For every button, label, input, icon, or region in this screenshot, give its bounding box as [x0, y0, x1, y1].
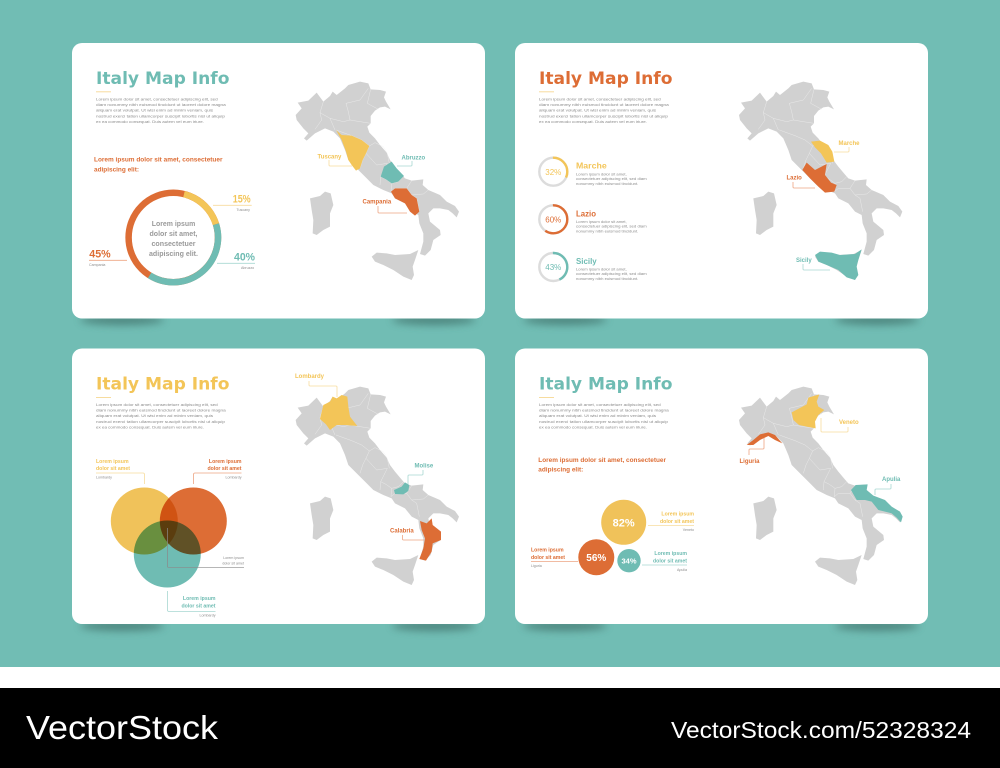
ring: Marche 32%: Lorem ipsum dolor sit amet,: [576, 172, 627, 176]
donut centre text: adipiscing elit.: [149, 251, 198, 258]
text block: nostrud exerci tation ullamcorper suscipit lobortis nisl ut aliquip: [539, 419, 668, 424]
region: Veneto: [792, 394, 824, 428]
text block: nostrud exerci tation ullamcorper suscipit lobortis nisl ut aliquip: [96, 113, 225, 118]
text block: Lorem ipsum dolor sit amet, consectetuer adipiscing elit, sed: [539, 96, 661, 102]
panel: Veneto Liguria Apulia bubbles: [515, 348, 928, 624]
callout: yellow set: [96, 459, 144, 484]
map: Italy with Tuscany Abruzzo Campania: [296, 82, 459, 280]
watermark url text: VectorStock.com/52328324: [671, 717, 971, 743]
text block: Lorem ipsum dolor sit amet, consectetuer adipiscing elit, sed: [539, 402, 661, 407]
callout: teal set: Lombardy: [200, 614, 216, 618]
ring: Lazio 60%: Lazio: [576, 210, 596, 218]
callout: Veneto: dolor sit amet: [660, 519, 694, 525]
panel: Marche Lazio Sicily rings: [515, 43, 928, 318]
callout: Veneto: Veneto: [683, 528, 694, 532]
map label: Veneto: Veneto: [839, 420, 859, 426]
map label: Apulia: [875, 477, 901, 495]
subheading: Lorem ipsum dolor sit amet, consectetuer: [538, 457, 666, 464]
donut centre text: [149, 221, 198, 258]
heading: Italy Map Info: [96, 69, 230, 89]
map label: Marche: Marche: [838, 141, 860, 147]
callout: Veneto: [648, 512, 694, 532]
callout: orange set: dolor sit amet: [207, 466, 242, 472]
callout: Apulia: [642, 551, 687, 572]
region: Lazio: [802, 163, 837, 193]
map label: Abruzzo: Abruzzo: [402, 156, 425, 162]
callout: Apulia: Lorem ipsum: [654, 551, 687, 557]
ring: Marche 32%: nonummy nibh euismod tincidunt.: [576, 182, 638, 186]
callout: Liguria: Lorem ipsum: [531, 548, 564, 554]
callout: 45%: Campania: [89, 263, 105, 267]
callout: yellow set: dolor sit amet: [96, 466, 130, 472]
callout: centre overlap: dolor sit amet: [222, 562, 244, 566]
bubble: 56%: 56%: [586, 553, 606, 564]
venn diagram: [111, 488, 227, 588]
watermark logo text: VectorStock: [26, 710, 218, 747]
map label: Sicily: [796, 258, 830, 270]
callout: 40%: Abruzzo: [241, 266, 254, 270]
map label: Tuscany: [318, 154, 352, 166]
bubble: 34%: 34%: [621, 556, 637, 566]
region: Tuscany: [336, 130, 369, 171]
map label: Marche: [834, 141, 860, 152]
subheading: Lorem ipsum dolor sit amet, consectetuer: [94, 157, 223, 164]
heading: Italy Map Info: [539, 374, 672, 394]
text block: aliquam erat volutpat. Ut wisi enim ad minim veniam, quis: [96, 413, 213, 418]
map label: Abruzzo: [397, 156, 425, 166]
callout: Veneto: Lorem ipsum: [661, 512, 694, 518]
region: Lombardy: [320, 395, 357, 430]
footer white strip: [0, 667, 1000, 688]
bubble: 56%: [578, 539, 614, 575]
text block: [96, 96, 227, 124]
callout: Apulia: Apulia: [677, 568, 687, 572]
text block: [539, 96, 670, 124]
text block: ex ea commodo consequat. Duis autem vel eum iriure.: [96, 119, 204, 124]
bubble: 82%: 82%: [613, 518, 635, 530]
text block: diam nonummy nibh euismod tincidunt ut laoreet dolore magna: [96, 102, 227, 107]
text block: [96, 402, 227, 430]
text block: ex ea commodo consequat. Duis autem vel eum iriure.: [539, 424, 647, 430]
callout: yellow set: Lorem ipsum: [96, 459, 129, 465]
donut centre text: dolor sit amet,: [150, 231, 198, 238]
callout: 15%: Tuscany: [236, 208, 250, 212]
map label: Campania: Campania: [362, 200, 392, 206]
map label: Calabria: Calabria: [390, 528, 414, 534]
ring: Marche 32%: Marche: [576, 162, 607, 170]
footer black bar: [0, 688, 1000, 768]
map label: Lombardy: Lombardy: [295, 374, 325, 380]
donut centre text: consectetuer: [152, 241, 196, 248]
region: Liguria: [747, 432, 782, 445]
ring: Sicily 43%: 43%: [545, 263, 561, 272]
callout: Liguria: dolor sit amet: [531, 555, 565, 561]
map label: Tuscany: Tuscany: [318, 154, 342, 160]
subheading: adipiscing elit:: [538, 466, 583, 474]
region: Campania: [391, 188, 419, 216]
region: Abruzzo: [381, 162, 404, 183]
text block: [539, 402, 670, 430]
map label: Campania: [362, 200, 407, 213]
callout: 45%: [89, 248, 127, 267]
callout: 15%: 15%: [233, 194, 251, 206]
panel: Lombardy Molise Calabria venn: [72, 348, 485, 624]
text block: diam nonummy nibh euismod tincidunt ut laoreet dolore magna: [539, 408, 670, 412]
shadows under panels: [80, 315, 919, 631]
subheading: [94, 157, 223, 174]
region: Calabria: [419, 518, 441, 561]
text block: aliquam erat volutpat. Ut wisi enim ad minim veniam, quis: [539, 413, 656, 418]
text block: ex ea commodo consequat. Duis autem vel eum iriure.: [96, 424, 204, 430]
region: Marche: [811, 141, 834, 163]
map label: Lombardy: [295, 374, 337, 397]
map label: Veneto: [821, 418, 859, 432]
ring: Marche 32%: consectetuer adipiscing elit, sed diam: [576, 177, 647, 181]
callout: teal set: dolor sit amet: [181, 604, 216, 610]
bubble: 34%: [617, 549, 641, 572]
map label: Liguria: [740, 438, 764, 465]
panel: Tuscany Abruzzo Campania donut: [72, 43, 485, 318]
map label: Molise: [408, 464, 434, 484]
ring: Sicily 43%: nonummy nibh euismod tincidunt.: [576, 277, 638, 281]
map label: Molise: Molise: [414, 464, 434, 470]
map label: Calabria: [390, 528, 424, 540]
ring: Lazio 60%: 60%: [545, 215, 561, 224]
text block: diam nonummy nibh euismod tincidunt ut laoreet dolore magna: [539, 102, 670, 107]
subheading: adipiscing elit:: [94, 166, 139, 174]
callout: orange set: Lombardy: [226, 476, 242, 480]
map label: Apulia: Apulia: [882, 477, 901, 483]
ring: Marche 32%: 32%: [545, 168, 561, 177]
map label: Liguria: Liguria: [740, 459, 760, 465]
ring: Sicily 43%: Lorem ipsum dolor sit amet,: [576, 268, 627, 272]
ring: Sicily 43%: consectetuer adipiscing elit, sed diam: [576, 272, 647, 276]
donut centre text: Lorem ipsum: [152, 221, 195, 228]
callout: orange set: [194, 459, 242, 484]
callout: teal set: Lorem ipsum: [183, 596, 216, 602]
callout: Liguria: Liguria: [531, 564, 542, 568]
callout: 40%: 40%: [234, 251, 255, 263]
callout: teal set: [168, 591, 216, 618]
callout: 15%: [213, 194, 252, 212]
ring: Sicily 43%: Sicily: [576, 257, 597, 266]
text block: aliquam erat volutpat. Ut wisi enim ad minim veniam, quis: [96, 108, 213, 113]
donut chart: [129, 193, 218, 282]
callout: centre overlap: Lorem ipsum: [223, 556, 244, 560]
ring: Sicily 43%: [539, 253, 647, 281]
bubble: 82%: [601, 500, 646, 545]
heading: Italy Map Info: [539, 69, 672, 89]
region: Sicily: [815, 249, 862, 280]
region: Apulia: [851, 484, 903, 522]
ring: Lazio 60%: [539, 205, 647, 234]
callout: 45%: 45%: [89, 248, 111, 260]
callout: 40%: [217, 251, 255, 270]
map label: Lazio: Lazio: [786, 176, 802, 182]
callout: Apulia: dolor sit amet: [653, 558, 687, 564]
subheading: [538, 457, 666, 474]
callout: centre overlap: [168, 528, 244, 567]
heading: Italy Map Info: [96, 374, 230, 394]
text block: nostrud exerci tation ullamcorper suscipit lobortis nisl ut aliquip: [539, 113, 668, 118]
ring: Marche 32%: [539, 158, 647, 186]
map label: Sicily: Sicily: [796, 258, 812, 264]
ring: Lazio 60%: Lorem ipsum dolor sit amet,: [576, 220, 627, 224]
text block: ex ea commodo consequat. Duis autem vel eum iriure.: [539, 119, 647, 124]
text block: nostrud exerci tation ullamcorper suscipit lobortis nisl ut aliquip: [96, 419, 225, 424]
text block: aliquam erat volutpat. Ut wisi enim ad minim veniam, quis: [539, 108, 656, 113]
ring: Lazio 60%: consectetuer adipiscing elit, sed diam: [576, 225, 647, 229]
text block: Lorem ipsum dolor sit amet, consectetuer adipiscing elit, sed: [96, 96, 218, 102]
map: Italy with Marche Lazio Sicily: [739, 82, 902, 280]
map: Italy with Veneto Liguria Apulia: [739, 387, 903, 585]
text block: Lorem ipsum dolor sit amet, consectetuer adipiscing elit, sed: [96, 402, 218, 407]
region: Molise: [394, 482, 409, 494]
text block: diam nonummy nibh euismod tincidunt ut laoreet dolore magna: [96, 408, 227, 412]
map: Italy with Lombardy Molise Calabria: [296, 387, 459, 585]
ring: Lazio 60%: nonummy nibh euismod tincidunt.: [576, 230, 638, 234]
callout: Liguria: [531, 548, 578, 568]
callout: yellow set: Lombardy: [96, 476, 112, 480]
callout: orange set: Lorem ipsum: [209, 459, 242, 465]
map label: Lazio: [786, 176, 815, 188]
